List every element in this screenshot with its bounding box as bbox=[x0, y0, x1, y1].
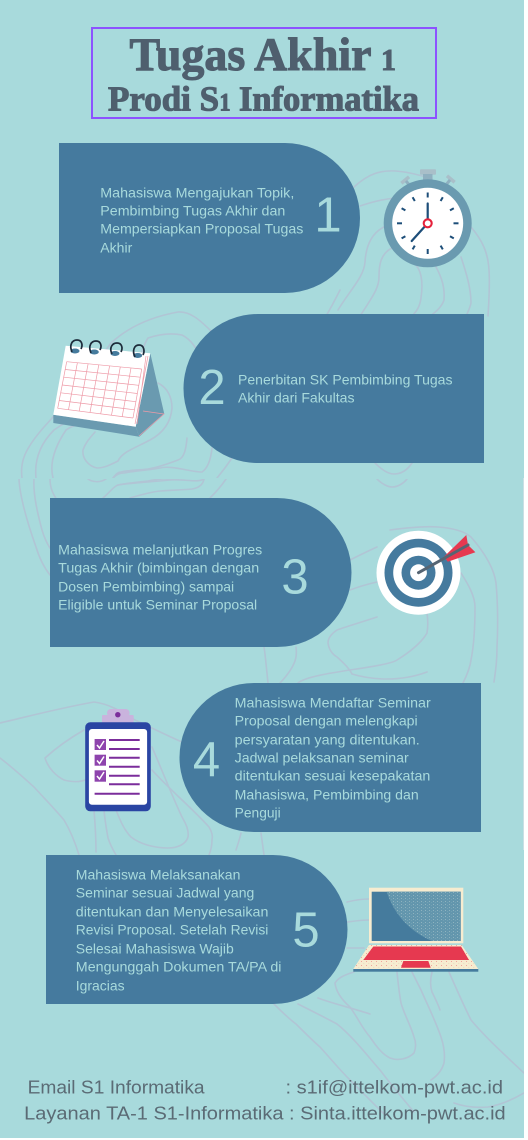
panel: step 1 bbox=[59, 143, 360, 293]
step 5 text: Selesai Mahasiswa Wajib bbox=[76, 942, 234, 957]
step 4 text: Penguji bbox=[235, 806, 281, 821]
step 3 text: Dosen Pembimbing) sampai bbox=[58, 580, 234, 595]
step 1 text: Mahasiswa Mengajukan Topik, bbox=[100, 186, 294, 201]
step 3 text bbox=[58, 543, 262, 613]
footer: contact details bbox=[24, 1076, 506, 1123]
step 4 text: persyaratan yang ditentukan. bbox=[235, 733, 420, 748]
step 2 text bbox=[238, 373, 453, 406]
step 3 number: 3 bbox=[281, 550, 309, 604]
step 5 text: Seminar sesuai Jadwal yang bbox=[76, 886, 254, 901]
title line 1: 1 bbox=[381, 42, 396, 77]
step 5 text: Mengunggah Dokumen TA/PA di bbox=[76, 960, 282, 975]
step 3 text: Mahasiswa melanjutkan Progres bbox=[58, 543, 262, 558]
title line 2: 1 bbox=[220, 90, 230, 116]
title line 2 bbox=[108, 80, 419, 118]
step 5 text: Revisi Proposal. Setelah Revisi bbox=[76, 923, 268, 938]
title line 2: Informatika bbox=[239, 80, 419, 118]
step 4 text: ditentukan sesuai kesepakatan bbox=[235, 769, 430, 784]
step 4 text bbox=[235, 696, 431, 821]
icon: clipboard checklist bbox=[85, 709, 151, 811]
icon: target with arrow bbox=[376, 531, 475, 615]
title line 1: Tugas Akhir bbox=[130, 29, 372, 81]
title line 2: Prodi S bbox=[108, 80, 219, 118]
step 5 text bbox=[76, 868, 282, 994]
email row: Email S1 Informatika bbox=[28, 1076, 205, 1097]
step 5 number: 5 bbox=[292, 904, 320, 958]
step 5 text: Igracias bbox=[76, 979, 125, 994]
panel: step 5 bbox=[46, 855, 348, 1004]
step 5 text: Mahasiswa Melaksanakan bbox=[76, 868, 240, 883]
step 1 number: 1 bbox=[314, 189, 342, 243]
step 2 number: 2 bbox=[198, 361, 226, 415]
email row bbox=[28, 1076, 503, 1097]
step 1 text: Akhir bbox=[100, 240, 133, 255]
step 2 text: Akhir dari Fakultas bbox=[238, 391, 355, 406]
step 4 number: 4 bbox=[193, 733, 220, 787]
step 4 text: Mahasiswa, Pembimbing dan bbox=[235, 788, 419, 803]
step 1 text: Mempersiapkan Proposal Tugas bbox=[100, 222, 304, 237]
step 5 text: ditentukan dan Menyelesaikan bbox=[76, 905, 268, 920]
panel: step 2 bbox=[184, 314, 484, 463]
step 4 text: Proposal dengan melengkapi bbox=[235, 714, 418, 729]
icon: laptop bbox=[353, 888, 478, 972]
icon: stopwatch bbox=[384, 169, 472, 267]
email row: : s1if@ittelkom-pwt.ac.id bbox=[286, 1076, 503, 1097]
icon: desk calendar bbox=[53, 340, 164, 437]
step 1 text bbox=[100, 186, 304, 255]
title box bbox=[92, 28, 436, 118]
service row: Layanan TA-1 S1-Informatika : Sinta.ittelkom-pwt.ac.id bbox=[24, 1102, 506, 1123]
step 3 text: Tugas Akhir (bimbingan dengan bbox=[58, 561, 259, 576]
step 4 text: Mahasiswa Mendaftar Seminar bbox=[235, 696, 431, 711]
step 3 text: Eligible untuk Seminar Proposal bbox=[58, 598, 257, 613]
step 2 text: Penerbitan SK Pembimbing Tugas bbox=[238, 373, 453, 388]
panel: step 4 bbox=[180, 683, 481, 832]
panel: step 3 bbox=[50, 498, 351, 647]
step 1 text: Pembimbing Tugas Akhir dan bbox=[100, 204, 285, 219]
step 4 text: Jadwal pelaksanan seminar bbox=[235, 751, 409, 766]
